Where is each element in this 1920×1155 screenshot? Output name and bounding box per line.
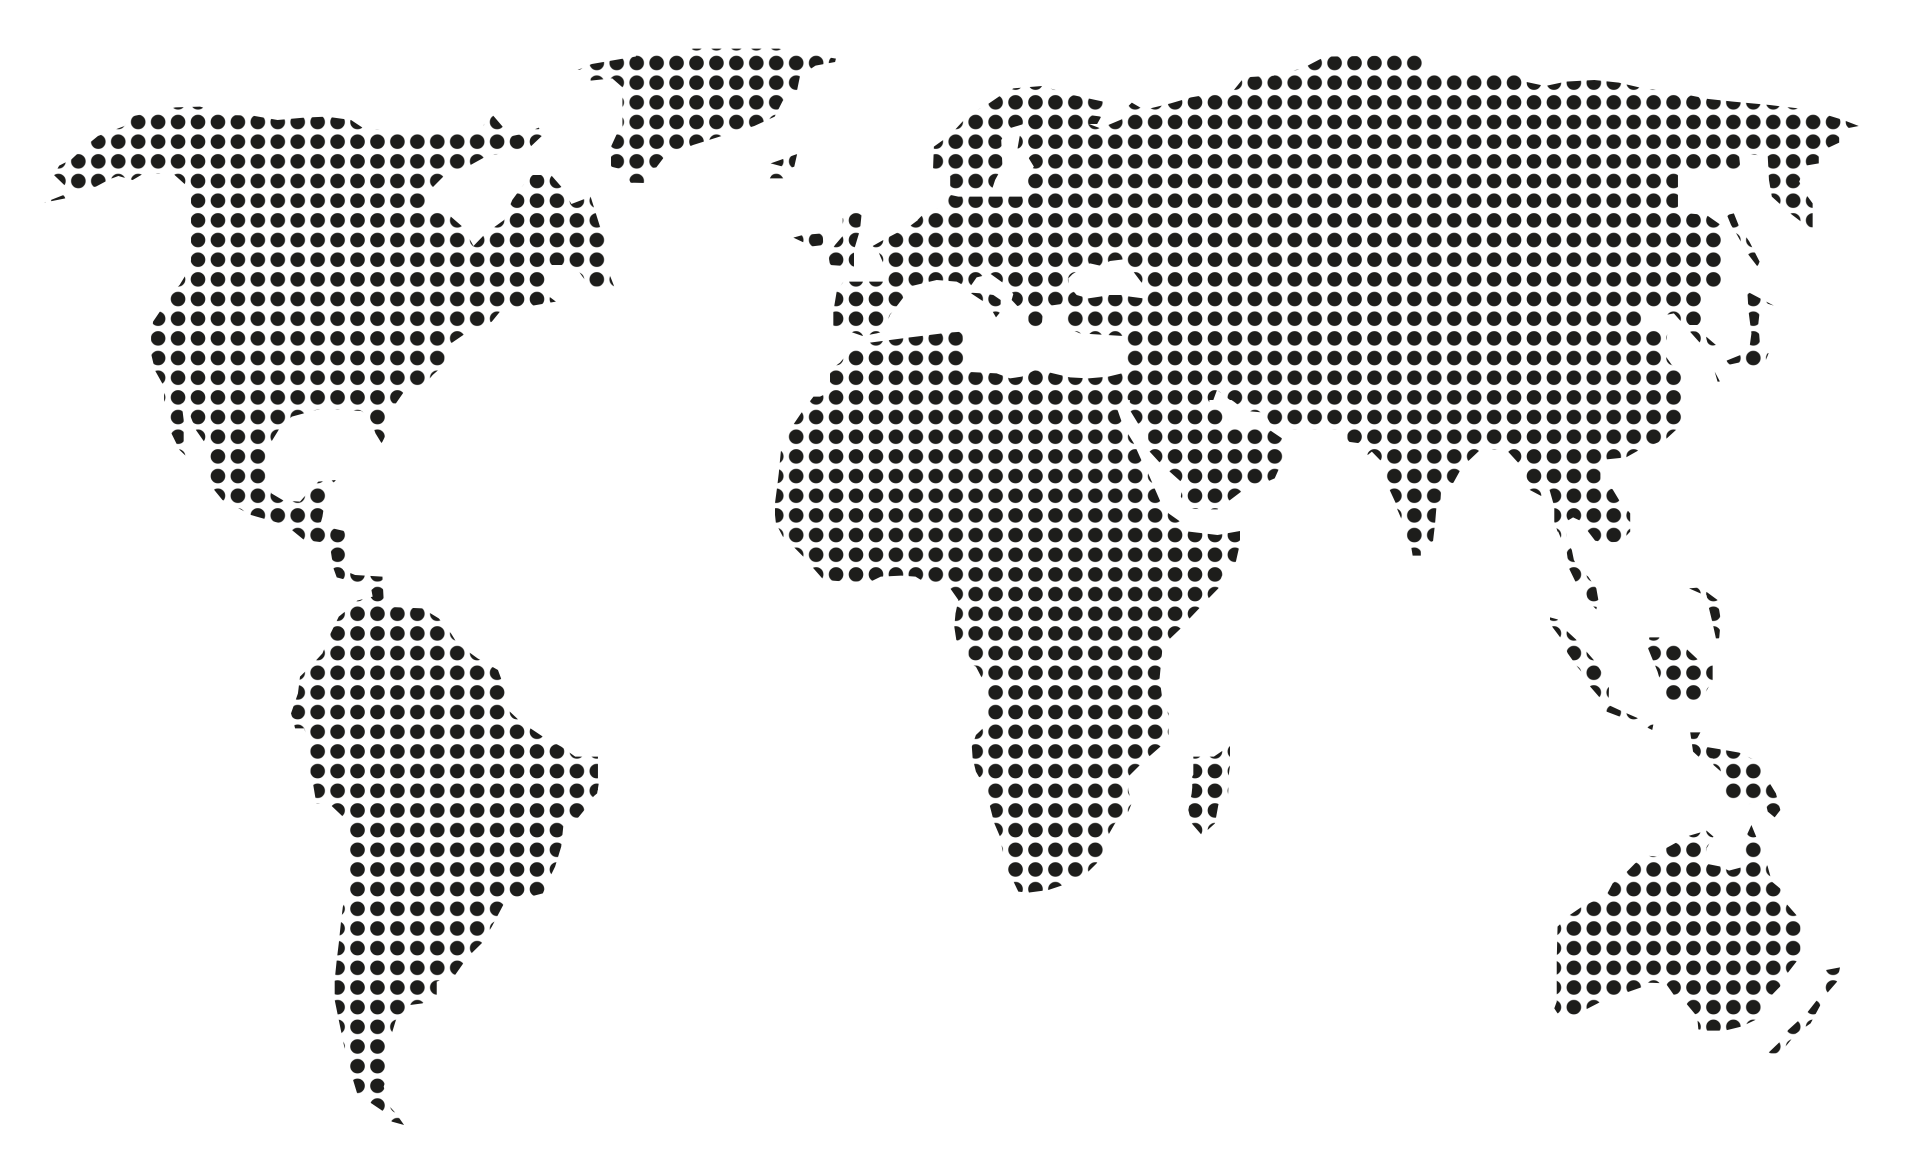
continent: Africa xyxy=(775,330,1250,895)
continent: Australia xyxy=(1554,825,1800,1031)
island: Madagascar xyxy=(1188,746,1230,834)
island: Iceland xyxy=(770,154,798,178)
landmass: Greenland xyxy=(578,48,836,183)
continent: Europe and Asia xyxy=(790,50,1890,620)
islands: Southeast Asia and Oceania xyxy=(1550,585,1795,820)
continent: North and South America xyxy=(40,100,620,1140)
islands: New Zealand xyxy=(1768,967,1840,1054)
